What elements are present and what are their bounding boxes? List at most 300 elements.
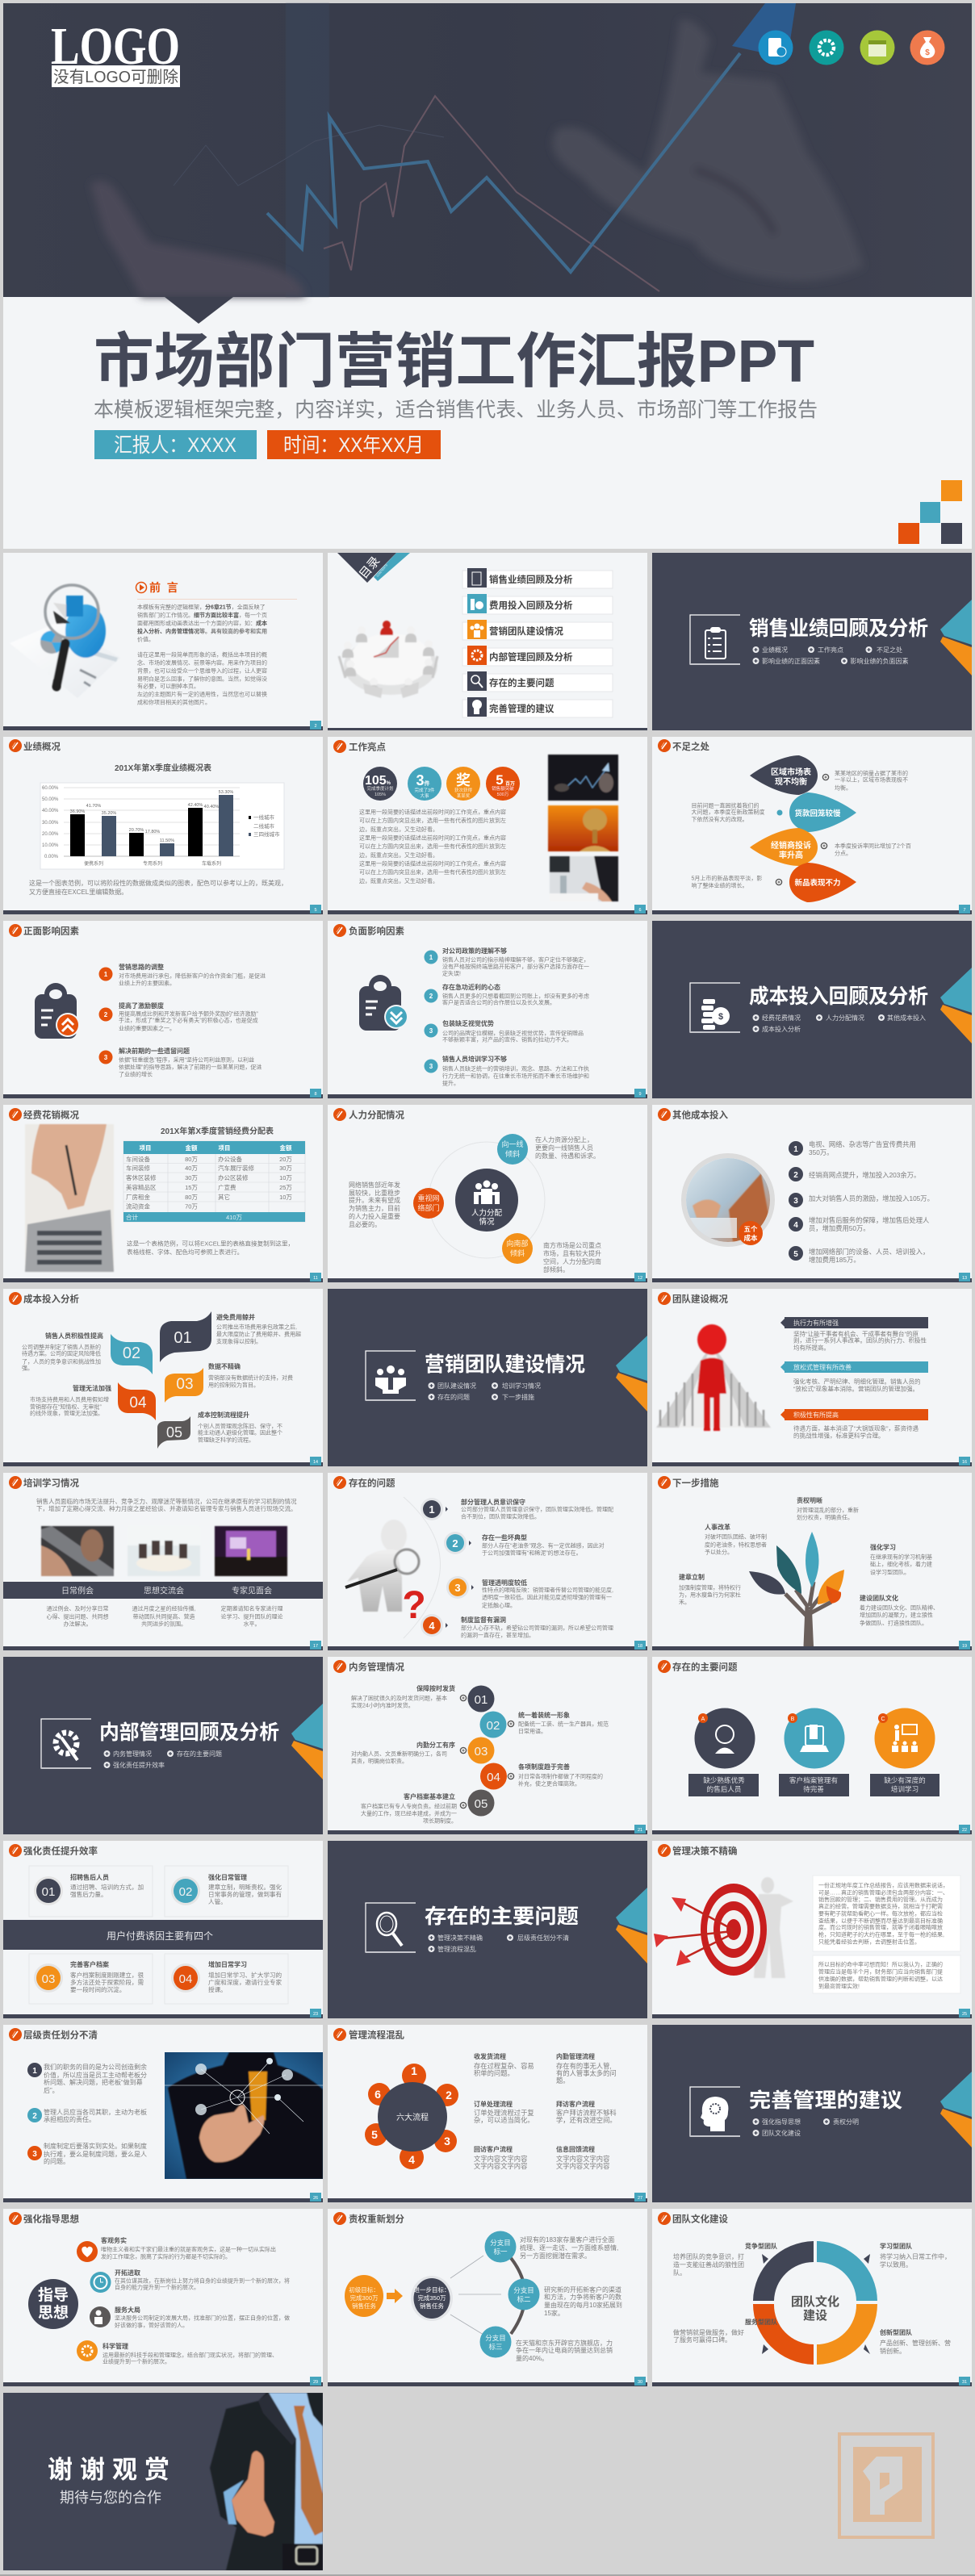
text: 竞争型团队: 培养团队的竞争意识，打: [673, 2252, 744, 2260]
bar chart: 40.00%: [42, 809, 59, 813]
table: 80万: [185, 1156, 198, 1163]
stat circle: 3件: 完成了3件: [414, 787, 435, 793]
item 2: 2: [32, 2112, 37, 2121]
text: 内勤管理流程: 存在有的事无人管,: [556, 2062, 612, 2070]
section bullets: 培训学习情况: [502, 1382, 541, 1390]
text: 放松式: 强化考核、严明纪律、明细化管理。销售人员的: [793, 1377, 920, 1385]
item text: 新品: [691, 875, 782, 889]
panel: section 完善管理的建议: [652, 2025, 972, 2202]
item text: 货款回笼: 大问题，本季度在新政策制度: [691, 809, 765, 815]
item: 开拓进取: 在其位谋其政，在新岗位上努力将自身的业绩提升到一个新的层次，将: [115, 2277, 290, 2284]
panel: 下一步措施: 19: [962, 1644, 967, 1649]
band: [3, 1920, 323, 1950]
panel: 管理决策不精确: 25: [962, 2012, 967, 2017]
card 02: 日常事务的管理，做到事有: [208, 1890, 282, 1898]
text: 内勤管理流程: 有的人管事太多的问: [556, 2069, 617, 2077]
stat circle: 105%: 105%: [375, 792, 386, 797]
panel: 培训学习情况: [3, 1473, 323, 1650]
text box 1: 只能凭着经验去判断，去调整射击位置。: [818, 1938, 920, 1945]
text 04: 管理无法加强: [73, 1384, 111, 1392]
text left: 提升。未来有望成: [349, 1196, 400, 1204]
item 4: 3: [429, 1063, 433, 1070]
photo: network hand: [165, 2052, 323, 2179]
text 03: 其责，明确岗位职责。: [351, 1758, 408, 1764]
primary goal: 销售任务: [352, 2302, 376, 2310]
text: 建设团队文化: 增加团队的凝聚力，建立狼性: [860, 1611, 933, 1619]
section bullets: 影响业绩的负面因素: [851, 657, 909, 665]
item: 开拓进取: [90, 2269, 290, 2293]
text: 回访客户流程: [474, 2145, 527, 2170]
text bottom right: 南方市场是公司重点: [543, 1241, 601, 1249]
text: 专家见面会: 论学习、提升团队的理论: [221, 1612, 282, 1620]
bar chart: 36.90%: [70, 809, 85, 814]
text: 收发货流程: 存在过程复杂、容易: [474, 2062, 534, 2070]
red node: [413, 1188, 444, 1219]
text block: 前言 body: 念、市场的发展情况、前景等内容。用来作为项目的: [137, 659, 267, 667]
leaf: 区域市场表现不均衡: [750, 755, 818, 795]
panel: 管理流程混乱: [328, 2025, 647, 2202]
text box 1: 真正的经营。管理需要数据支持，就相当于打靶需: [818, 1903, 943, 1909]
item 1: 350万。: [809, 1148, 833, 1156]
text 01: 避免费用鲸并: [216, 1313, 255, 1321]
item 4: 增加对售后服务的保障，增加售后处理人: [809, 1216, 929, 1224]
card 04: 授课。: [208, 1985, 227, 1993]
subtitle: 本模板逻辑框架完整，内容详实，适合销售代表、业务人员、市场部门等工作报告: [94, 399, 818, 421]
bar chart: 35.20%: [102, 811, 116, 816]
leaf: 新品表现不力: [789, 863, 856, 902]
panel: 层级责任划分不清: 26: [313, 2196, 318, 2201]
panel: 人力分配情况: 12: [638, 1276, 642, 1281]
text box 1: 一份正规地年度工作总结报告，应该用数据来说话，: [818, 1882, 948, 1888]
card 01: 01: [42, 1885, 55, 1899]
item 3: 制度制定后要落实到实处。如果制度: [44, 2142, 147, 2150]
item 4: 销售人员缺乏统一的营销培训，观念、思路、方法和工作执: [442, 1065, 589, 1072]
icon: head: [701, 2097, 728, 2131]
text 03: 数据不精确: [208, 1362, 241, 1370]
teal node: 向一线: [501, 1140, 524, 1148]
card 03: 完善客户档案: [70, 1960, 109, 1968]
item text: 新品: 响了整体业绩的增长。: [691, 881, 747, 889]
panel: 管理决策不精确: [652, 1841, 972, 2018]
text 05: 成本控制流程提升: [198, 1411, 249, 1419]
card 04: 增加日常学习、扩大学习的: [208, 1971, 282, 1979]
item 2: [98, 1002, 258, 1031]
logo: [51, 17, 180, 87]
text: 建设团队文化: 着力建设团队文化、团队精神、: [860, 1604, 939, 1611]
heading: 责权重新划分: [349, 2213, 404, 2224]
text 05: [361, 1792, 467, 1824]
card C: C: [881, 1717, 885, 1722]
section title: 营销团队建设情况: [425, 1353, 585, 1376]
leaf: 经销商投诉率升高: 率升高: [779, 850, 803, 860]
heading: 团队建设概况: [672, 1293, 728, 1304]
panel: 不足之处: [652, 737, 972, 914]
item: 营销团队建设情况: [462, 620, 613, 640]
table: 办公区装修: [218, 1173, 249, 1181]
text: 学习型团队: 学习型团队: [880, 2242, 912, 2250]
item: 客观务实: [77, 2236, 276, 2262]
stat circle: 5百万: 5: [496, 772, 504, 788]
section bullets: 不足之处: [877, 646, 902, 654]
item 3: 3: [429, 1027, 433, 1035]
big oval: [28, 2279, 78, 2329]
text: 建章立制: 加强制度管理，将特权行: [679, 1583, 741, 1591]
section title: 成本投入回顾及分析: [749, 985, 928, 1008]
text: 人事改革: 予以处分。: [705, 1548, 733, 1556]
text 03: 用的控制较为盲目。: [208, 1382, 259, 1388]
next goal: 进一步目标：: [413, 2285, 450, 2294]
item 3: 3: [32, 2150, 37, 2159]
text: 订单处理流程: 订单处理流程过于复: [474, 2109, 534, 2117]
text: 人事改革: 度的老油条，特权思想者: [705, 1541, 767, 1548]
orange node: [502, 1233, 533, 1264]
item 1: 销售人员对公司的指示精神理解不够，客户定位不够确定，: [442, 956, 589, 964]
table: 410万: [226, 1214, 243, 1221]
text box 1: 枪，只知道靶子的大约在哪里，至于每一枪的结果,: [818, 1930, 944, 1938]
item 3: 解决前期的一些遗留问题: [119, 1047, 190, 1055]
text block: 前言 body: 本模板有完整的逻辑框架，分6章21节，全面反映了: [137, 605, 266, 610]
panel: 责权重新划分: 30: [638, 2380, 642, 2385]
card A: A: [701, 1717, 705, 1722]
text: 拜访客户流程: 拜访客户流程: [556, 2100, 595, 2108]
text: 责权明晰: 责权明晰: [797, 1496, 822, 1504]
band: 日常例会: [61, 1585, 94, 1596]
section bullets: [103, 1750, 222, 1769]
item 2: 存在急功近利的心态: [442, 983, 500, 991]
item 4: 销售人员培训学习不够: [442, 1055, 507, 1063]
item 1: 1: [104, 971, 108, 978]
item 2: 经销商网点提升，增加投入203余万。: [809, 1171, 920, 1179]
bar: 积极性有所提高: [780, 1409, 928, 1420]
section bullets: 业绩概况: [762, 646, 788, 654]
heading: 前言: [136, 581, 297, 600]
card C: 培训学习: [891, 1784, 919, 1793]
text 04: 市场支持费用和人员费用假如增: [30, 1396, 109, 1403]
text 01: 实现24小时内准时发货。: [351, 1701, 414, 1709]
item 4: 的漏洞一直存在，甚至增加。: [461, 1632, 534, 1638]
branch 3: [479, 2326, 512, 2358]
logo: 没有LOGO可删除: [53, 68, 178, 86]
card A: 缺少熟练优秀: [703, 1775, 745, 1784]
panel: 前言: [3, 553, 323, 730]
main title: 市场部门营销工作汇报PPT: [94, 328, 814, 395]
text: 建设团队文化: 建设团队文化: [860, 1594, 898, 1602]
text block: 前言 body: 背景，也可以给受众一个思维导入的过程，让人更容: [137, 667, 267, 675]
text box 1: 可是……真正的销售管理必须包含两部分内容：一、: [818, 1888, 948, 1896]
bar chart: 40.40%: [204, 805, 219, 809]
panel: 存在的问题: [328, 1473, 647, 1650]
text block: 这里用一段简要的话描述出前段时间的工作亮点，重点内容: [359, 860, 506, 867]
item 4: 行力无统一和协调，在往重长市场开拓而不重长市场维护和: [442, 1072, 589, 1080]
text: 专家见面会: 定期邀请知名专家进行理: [221, 1604, 282, 1612]
text 02: 了，人员的竞争意识和挑战性加: [22, 1357, 101, 1365]
heading: 团队文化建设: [672, 2213, 728, 2224]
item: 开拓进取: 自身的能力提升到一个新的层次。: [115, 2284, 199, 2290]
item: 服务大局: 好该做的事，管好该管的人。: [115, 2321, 188, 2329]
text: 订单处理流程: [474, 2100, 534, 2124]
process flower: 5: [371, 2128, 378, 2141]
section bullets: 强化责任提升效率: [113, 1761, 165, 1769]
process flower: 4: [408, 2153, 415, 2166]
text 05: 客户档案已有专人专岗负责。经过前期: [361, 1803, 457, 1809]
text: 建设团队文化: 争做团队、打造狼性团队。: [860, 1619, 927, 1627]
item: 销售业绩回顾及分析: 销售业绩回顾及分析: [489, 574, 573, 585]
text: 执行力: 则，进行一系列人事改革。团队的执行力、积极性: [793, 1336, 927, 1344]
heading: 存在的主要问题: [672, 1661, 738, 1672]
item 1: 对市场费用进行承包，降低新客户的合作资金门槛，是促进: [119, 972, 266, 980]
panel: cover slide: [3, 3, 972, 549]
section bullets: 存在的问题: [437, 1393, 470, 1401]
section bullets: 内务管理情况: [113, 1750, 152, 1758]
text block: 前言 body: 易明白是怎么回事，了解你的意图。当然，如觉得没: [137, 675, 267, 683]
section bullets: 经费花费情况: [762, 1014, 801, 1022]
card 04: 增加日常学习: [208, 1960, 247, 1968]
heading: 经费花销概况: [23, 1109, 79, 1120]
orange node: 向南部: [506, 1239, 529, 1248]
panel: section 销售业绩回顾及分析: [652, 553, 972, 730]
text: 建章立制: [679, 1573, 741, 1606]
contents ribbon: [337, 553, 410, 583]
heading: 负面影响因素: [349, 925, 404, 936]
section bullets: 下一步措施: [502, 1393, 534, 1401]
bar chart: 42.40%: [188, 803, 203, 808]
item 2: 手法，形成了“重奖之下必有勇夫”的积极心态，也是促成: [119, 1017, 258, 1023]
bar chart: 车载系列: [202, 860, 221, 867]
heading: 正面影响因素: [23, 925, 79, 936]
panel: 团队建设概况: [652, 1289, 972, 1466]
panel: 业绩概况: [3, 737, 323, 914]
connector lines: [450, 2256, 501, 2335]
panel: 内务管理情况: 21: [638, 1828, 642, 1833]
section title: 内部管理回顾及分析: [99, 1721, 279, 1744]
panel: 经费花销概况: 11: [313, 1276, 318, 1281]
text: 竞争型团队: 队。: [673, 2269, 686, 2277]
panel: 目录: [328, 553, 647, 730]
text block: 这里用一段简要的话描述出前段时间的工作亮点，重点内容: [359, 834, 506, 841]
item: 科学管理: [77, 2340, 278, 2365]
bar: 放松式管理有所改善: 放松式管理有所改善: [793, 1363, 852, 1371]
item 2: 业绩的重要因素之一。: [119, 1025, 175, 1031]
item: 费用投入回顾及分析: [462, 594, 613, 614]
stat circle: 105%: [363, 767, 397, 801]
item 3: 性特点的眼睛反映：销管理者传替公司管理的能见度,: [482, 1587, 613, 1593]
section bullets: [428, 1382, 541, 1401]
text: 学习型团队: [880, 2242, 951, 2269]
panel: 工作亮点: [328, 737, 647, 914]
text: 拜访客户流程: [556, 2100, 617, 2124]
panel: 不足之处: 7: [963, 908, 966, 913]
item 1: 1: [429, 954, 433, 961]
stat circle: 5百万: [486, 767, 520, 801]
item 3: 的问题。: [44, 2157, 69, 2165]
text left: 为销售主力，目前: [349, 1204, 400, 1212]
center circle: [455, 1169, 518, 1232]
icon: clipboard up: [35, 983, 80, 1039]
flag 04: 04: [129, 1395, 147, 1411]
text 02: [508, 1711, 609, 1735]
item 2: 2: [104, 1011, 108, 1018]
table: 车间设备: [126, 1155, 150, 1163]
text: 强化学习: 础上，细化考核，着力建: [870, 1561, 932, 1567]
icon: team: [375, 1365, 406, 1394]
item: 销售业绩回顾及分析: [462, 568, 613, 588]
branch 1: 分支目: [490, 2239, 511, 2247]
table: 30万: [185, 1174, 198, 1181]
text block: 前言 body: 请在这里用一段简单而形象的话，概括出本项目的概: [137, 650, 267, 659]
table: 流动资金: [126, 1202, 150, 1211]
icon: clipboard down: [359, 975, 408, 1031]
text 04: 对日常各项制作都做了不同程度的: [518, 1772, 603, 1780]
icon: gear and wrench: [56, 1733, 77, 1760]
bar chart: 0.00%: [44, 855, 59, 859]
donut chart: 团队文化: [791, 2294, 839, 2309]
process flower: [365, 2064, 458, 2169]
item 4: 4: [793, 1221, 798, 1230]
text right top: 更要向一线销售人员: [535, 1144, 593, 1152]
stat circle: 5百万: 销售额突破: [492, 785, 514, 792]
stat circle: 105%: 105%: [365, 774, 391, 788]
donut chart: [753, 2241, 877, 2365]
process flower: 1: [411, 2064, 417, 2077]
icon: clipboard: [705, 627, 726, 659]
text block: 这是一个表格范例，可以将EXCEL里的表格直接复制到这里，: [127, 1240, 294, 1248]
item 3: 3: [793, 1197, 798, 1206]
illustration: target and darts: [654, 1884, 767, 1976]
item: 服务大局: 坚决服务公司制定的发展大局，找准部门的位置，摆正自身的位置，做: [115, 2315, 290, 2321]
text: 人事改革: 人事改革: [705, 1523, 730, 1531]
bar chart: 11.50%: [160, 838, 174, 843]
item text: 区域市场: [822, 770, 908, 791]
table: 80万: [185, 1194, 198, 1201]
heading: 不足之处: [672, 741, 709, 752]
text 01: 支现象得以控制。: [216, 1338, 262, 1344]
table: 项目: [139, 1144, 152, 1152]
item 4: [425, 1055, 589, 1086]
node 05: [468, 1790, 494, 1816]
text: 思想交流会: 带动团队共同提高、营造: [132, 1612, 195, 1620]
text 04: 补充，使之更合理高效。: [518, 1780, 580, 1787]
branch 3: 分支目: [485, 2334, 506, 2342]
text 02: 强。: [22, 1365, 33, 1372]
leaf: 货款回笼较慢: 货款回笼较慢: [794, 809, 841, 818]
item: 科学管理: 业绩提升到一个新的层次。: [103, 2358, 170, 2365]
panel: 其他成本投入: 13: [962, 1276, 967, 1281]
band: 专家见面会: [232, 1585, 272, 1596]
panel: 前言: 2: [314, 724, 317, 729]
text branch 1: 梳理、逐一走访、一方面维系感情,: [520, 2244, 618, 2252]
illustration: round table: [339, 621, 437, 698]
stat circle: 105%: 完成季度计划: [366, 785, 394, 792]
text 01: [216, 1313, 301, 1344]
text block: 边，既重点突出，又生动好看。: [359, 851, 438, 859]
item text: 货款回笼: 下依然没有大的改观。: [691, 815, 747, 823]
flag 03: 03: [176, 1376, 194, 1393]
item 2: [425, 983, 589, 1006]
text: 拜访客户流程: 客户拜访流程不够科: [556, 2109, 617, 2117]
panel: 成本投入分析: 14: [313, 1460, 318, 1465]
item 2: [789, 1167, 920, 1181]
text 04: 营销部存在“知情权、无审批”: [30, 1403, 102, 1411]
item 2: [27, 2108, 147, 2123]
text 04: [30, 1384, 111, 1417]
text box 1: 要有靶子就帮助看靶心一样。每次放枪，都应当检: [818, 1909, 943, 1917]
node 01: 01: [475, 1693, 488, 1707]
photo: chart arrow: [548, 755, 618, 801]
text: 日常例会: 通过例会、及时分享日常: [47, 1604, 108, 1612]
branch 1: [484, 2231, 517, 2263]
item text: 区域市场: 均衡。: [835, 784, 852, 791]
panel: 存在的主要问题 cards: [652, 1657, 972, 1834]
bar chart: 二线城市: [253, 822, 274, 830]
heading: 层级责任划分不清: [23, 2029, 98, 2040]
text branch 1: 对现有的183家存量客户进行全面: [520, 2235, 614, 2244]
item 1: [425, 947, 589, 976]
text: 人事改革: [705, 1523, 767, 1556]
text 01: [351, 1684, 467, 1709]
panel: 强化指导思想: 29: [313, 2380, 318, 2385]
bar chart: 41.70%: [86, 804, 101, 809]
bar: 积极性有所提高: 积极性有所提高: [793, 1411, 839, 1419]
text: 内勤管理流程: 内勤管理流程: [556, 2052, 595, 2060]
item 5: [789, 1246, 929, 1264]
text 02: 日常用语。: [518, 1727, 546, 1735]
text box 1: [813, 1876, 960, 1951]
section bullets: 团队文化建设: [762, 2129, 801, 2137]
node 03: [468, 1737, 494, 1764]
item 2: 销售人员更多的只想着截回到公司账上，却没有更多的考虑: [442, 993, 589, 999]
panel: 强化指导思想: [3, 2209, 323, 2386]
item 3: 不够新颖丰富，对产品的宣传、销售的拉动力不大。: [442, 1036, 572, 1043]
text right top: 在人力资源分配上，: [535, 1135, 593, 1144]
item 3: [425, 1019, 584, 1043]
icon row top right: $: [925, 48, 930, 57]
panel: 强化责任提升效率: [3, 1841, 323, 2018]
item 2: 2: [793, 1171, 798, 1180]
intro text: 下，增加了定期心得交流、种力月度之星经验谈、并邀请知名管理专家与销售人员进行现场交流。: [36, 1504, 297, 1512]
text: 回访客户流程: 回访客户流程: [474, 2145, 513, 2153]
photo ring: [684, 1156, 773, 1245]
bar chart: 专用系列: [143, 860, 162, 867]
item 1: 合不到位，团队管理实效降低。: [461, 1512, 540, 1520]
heading: 内务管理情况: [349, 1661, 404, 1672]
panel: 经费花销概况: [3, 1105, 323, 1282]
text block: 又方便直接在EXCEL里编辑数据。: [29, 888, 128, 896]
card B: [779, 1708, 849, 1796]
item text: 区域市场: 某某地区的销量占据了某市的: [835, 770, 908, 776]
panel: 存在的主要问题 cards: 22: [962, 1828, 967, 1833]
panel: 团队文化建设: [652, 2209, 972, 2386]
illustration: tree: [749, 1532, 844, 1646]
text: 订单处理流程: 杂，可以适当简化。: [474, 2116, 534, 2124]
process flower: 2: [446, 2089, 452, 2101]
bar chart: 三四线城市: [253, 830, 280, 838]
badge: reporter: 汇报人：XXXX: [114, 434, 236, 457]
item 3: [98, 1047, 262, 1078]
item 3: 3: [104, 1054, 108, 1061]
item 3: 定抵触心理。: [482, 1601, 516, 1609]
bar chart: 便携系列: [84, 860, 103, 867]
flag 02: [111, 1334, 153, 1374]
text: 服务型团队: 服务型团队: [745, 2318, 777, 2326]
card 02: [165, 1866, 288, 1917]
card C: [870, 1708, 939, 1796]
text 02: 公司调整并制定了销售人员新的: [22, 1343, 101, 1351]
table: 金额: [279, 1144, 292, 1152]
item 3: 公司的品牌定位模糊，包装缺乏视觉优势，宣传促销赠品: [442, 1030, 584, 1036]
item 3: 依据“轻重缓急”程序，采用“坚持公司利益原则，以利益: [119, 1056, 254, 1064]
text: 信息回馈流程: [556, 2145, 609, 2170]
item: 完善管理的建议: 完善管理的建议: [489, 703, 554, 714]
